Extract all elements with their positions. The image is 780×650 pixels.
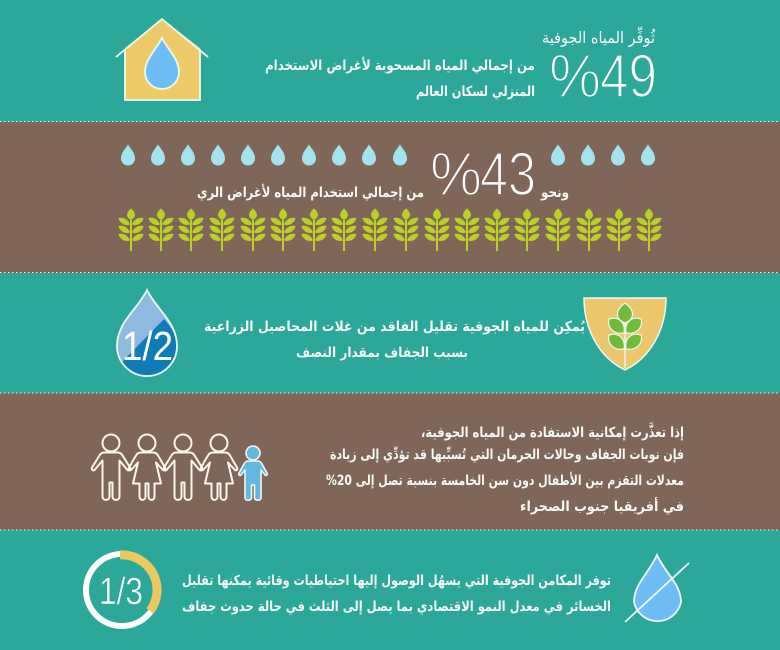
text: share of domestic withdrawals: من إجمالي المياه المسحوبة لأغراض الاستخدام bbox=[265, 57, 535, 74]
text: buffers against economic losses bbox=[182, 573, 611, 616]
panel: irrigation background bbox=[0, 122, 780, 273]
icon: crossed-out water drop bbox=[625, 555, 689, 622]
text: share of domestic withdrawals bbox=[265, 57, 535, 100]
panel: household use background bbox=[0, 0, 780, 122]
icon: shield with wheat bbox=[584, 298, 666, 370]
figure: man two bbox=[164, 434, 202, 500]
icon: family of five figures bbox=[92, 434, 267, 500]
figure: woman bbox=[129, 434, 165, 500]
stat: 43 percent: % bbox=[430, 140, 482, 208]
figure: child bbox=[239, 446, 267, 500]
text: reducing crop losses: يُمكِن للمياه الجوفية تقليل الفاقد من غلات المحاصيل الزراعية bbox=[204, 319, 585, 335]
text: stunting consequences: معدلات التقزم بين الأطفال دون سن الخامسة بنسبة تصل إلى 20% bbox=[326, 472, 684, 489]
figure: woman two bbox=[201, 434, 237, 500]
text: stunting consequences: إذا تعذَّرت إمكانية الاستفادة من المياه الجوفية، bbox=[421, 421, 684, 441]
icon: one-third ring: 1/3 bbox=[99, 571, 143, 613]
icon: one-third ring bbox=[86, 554, 158, 626]
text: and about: ونحو bbox=[540, 185, 569, 201]
text: stunting consequences: فإن نوبات الجفاف وحالات الحرمان التي تُسبِّبها قد تؤدِّي إلى زيادة bbox=[330, 446, 684, 464]
text: reducing crop losses bbox=[204, 319, 585, 361]
text: buffers against economic losses: توفر المكامن الجوفية التي يسهُل الوصول إليها احتياطيات وقائية يمكنها تقليل bbox=[182, 573, 611, 589]
icon row: wheat plants bbox=[118, 208, 662, 251]
icon: house with water drop bbox=[116, 19, 208, 100]
icon: half-filled water drop bbox=[117, 290, 177, 376]
text: buffers against economic losses: الخسائر في معدل النمو الاقتصادي بما يصل إلى الثلث في حالة حدوث جفاف bbox=[182, 599, 611, 616]
figure: man bbox=[92, 434, 130, 500]
icon row: water drops bbox=[121, 144, 655, 166]
stat: 43 percent: 43 bbox=[480, 140, 536, 208]
icon: half-filled water drop: 1/2 bbox=[122, 323, 173, 369]
stat: 49 percent bbox=[549, 42, 657, 110]
text: groundwater supplies: ثُوفِّر المياه الجوفية bbox=[542, 26, 656, 47]
panel: economic growth background bbox=[0, 530, 780, 650]
text: reducing crop losses: بسبب الجفاف بمقدار النصف bbox=[296, 345, 468, 361]
text: share of irrigation use: من إجمالي استخدام المياه لأغراض الري bbox=[197, 184, 424, 202]
panel: child stunting background bbox=[0, 393, 780, 530]
stat: 49 percent: % bbox=[549, 42, 601, 110]
stat: 43 percent bbox=[430, 140, 536, 208]
stat: 49 percent: 49 bbox=[600, 42, 657, 110]
text: stunting consequences bbox=[326, 421, 684, 515]
text: stunting consequences: في أفريقيا جنوب الصحراء bbox=[520, 497, 684, 515]
text: share of domestic withdrawals: المنزلي لسكان العالم bbox=[416, 84, 535, 100]
panel: crop losses background bbox=[0, 273, 780, 393]
